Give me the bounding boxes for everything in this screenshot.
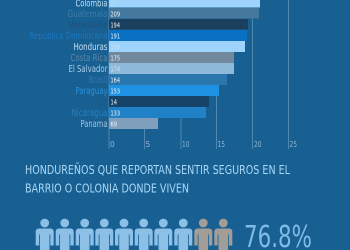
axis labels	[110, 140, 297, 149]
bar values: 175	[110, 54, 120, 62]
country labels: Costa Rica	[70, 53, 108, 64]
country labels: Panama	[80, 119, 108, 130]
axis labels: 15	[218, 140, 225, 149]
country labels: Nicaragua	[72, 108, 108, 119]
bar values: 153	[110, 88, 120, 96]
axis labels: 25	[290, 140, 297, 149]
heading: Hondurans who feel safe	[25, 162, 290, 196]
bar values: 21	[110, 0, 116, 8]
country labels: Honduras	[74, 42, 108, 53]
bar values: 174	[110, 66, 120, 74]
bar chart: homicide rate by country: Chile	[96, 97, 108, 108]
bar values: 209	[110, 10, 120, 18]
country labels: El Salvador	[68, 64, 108, 75]
bars	[109, 0, 260, 129]
bar values: 133	[110, 110, 120, 118]
axis labels: 20	[254, 140, 262, 149]
axis labels: 5	[146, 140, 150, 149]
country labels: Paraguay	[76, 86, 108, 97]
bar values: 164	[110, 76, 120, 84]
bar values: 69	[110, 120, 117, 128]
axis labels: 0	[110, 140, 115, 149]
country labels: Guatemala	[68, 9, 108, 20]
country labels: Brasil	[88, 75, 108, 86]
axis labels: 10	[182, 140, 190, 149]
bar chart: homicide rate by country	[30, 0, 297, 149]
bar values	[110, 0, 120, 128]
bar values: 14	[110, 98, 117, 106]
bar values: 189	[110, 44, 120, 52]
country labels	[30, 0, 108, 130]
country labels: Venezuela	[68, 20, 108, 31]
bar values: 191	[110, 32, 120, 40]
bar values: 194	[110, 22, 120, 30]
country labels: República Dominicana	[30, 30, 108, 42]
pictogram: people, 8 of 10 highlighted	[36, 219, 232, 250]
heading: Hondurans who feel safe: BARRIO O COLONIA DONDE VIVEN	[25, 182, 189, 196]
